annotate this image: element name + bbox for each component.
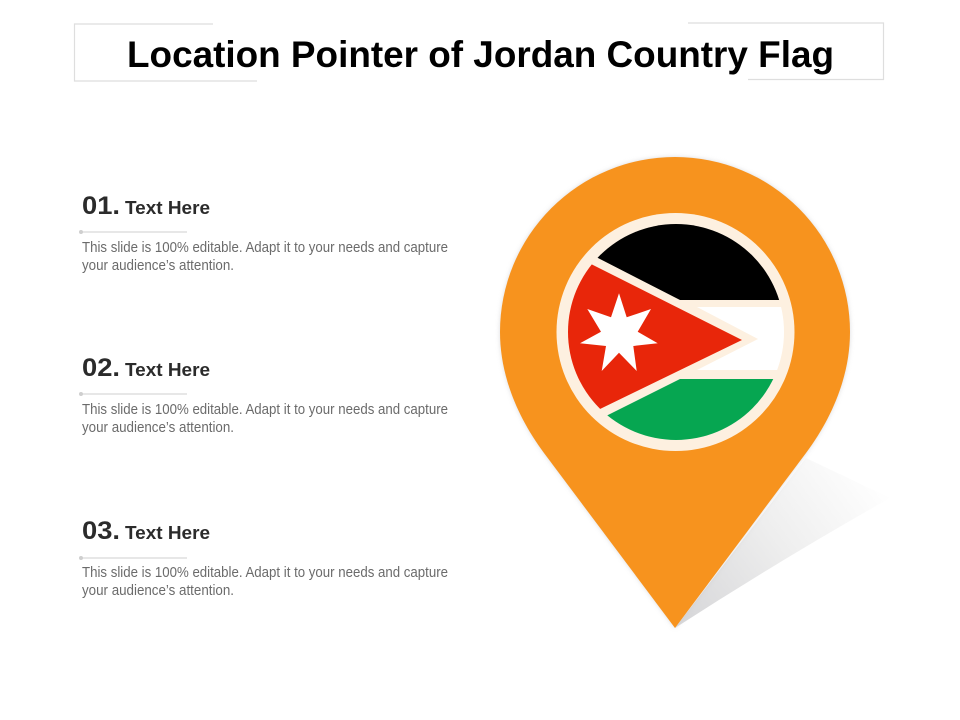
text block 01 bbox=[79, 192, 448, 274]
text block 01: Text Here bbox=[125, 198, 210, 218]
title: Location Pointer of Jordan Country Flag bbox=[127, 34, 834, 75]
text block 03: 03. bbox=[82, 517, 120, 545]
red triangle bbox=[568, 264, 742, 409]
pin cast shadow bbox=[675, 458, 890, 628]
text block 03: Text Here bbox=[125, 523, 210, 543]
title frame bbox=[74, 23, 884, 81]
Jordan flag badge bbox=[556, 213, 794, 451]
seven-point star bbox=[580, 293, 658, 371]
text block 02 bbox=[79, 354, 448, 436]
text block 03: your audience’s attention. bbox=[82, 582, 234, 599]
text block 02: This slide is 100% editable. Adapt it to your needs and capture bbox=[82, 401, 448, 418]
text block 02: 02. bbox=[82, 354, 120, 382]
map pin bbox=[500, 157, 850, 628]
text block 02: your audience’s attention. bbox=[82, 419, 234, 436]
text block 01: 01. bbox=[82, 192, 120, 220]
text block 02: Text Here bbox=[125, 360, 210, 380]
text block 01: This slide is 100% editable. Adapt it to your needs and capture bbox=[82, 239, 448, 256]
black band bbox=[598, 224, 780, 300]
text block 01: your audience’s attention. bbox=[82, 257, 234, 274]
green band bbox=[607, 379, 774, 440]
text block 03 bbox=[79, 517, 448, 599]
text block 03: This slide is 100% editable. Adapt it to your needs and capture bbox=[82, 564, 448, 581]
white band bbox=[698, 307, 784, 370]
